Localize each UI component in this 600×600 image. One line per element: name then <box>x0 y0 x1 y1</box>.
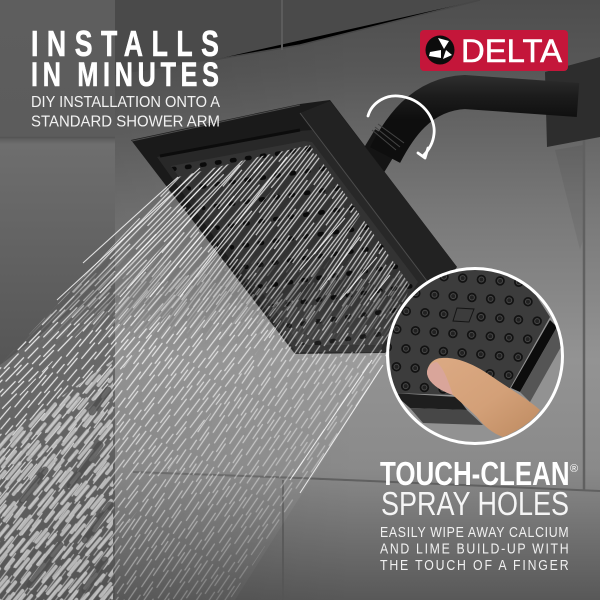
callout: finger on spray holes <box>386 267 564 445</box>
water spray streaks <box>0 145 410 600</box>
text: installation description: DIY INSTALLATION ONTO A <box>31 94 220 111</box>
logo mark <box>426 36 454 64</box>
shower arm and wall plate <box>368 57 600 170</box>
heading: touch-clean spray holes: ® <box>570 463 578 475</box>
Delta logo <box>420 30 568 71</box>
text: touch-clean description: THE TOUCH OF A FINGER <box>380 557 569 573</box>
text: touch-clean description: EASILY WIPE AWAY CALCIUM <box>380 524 569 540</box>
icon: square sensor mark <box>453 308 474 322</box>
heading: touch-clean spray holes <box>380 456 578 522</box>
heading: installs in minutes <box>31 23 219 94</box>
text: installation description: STANDARD SHOWER ARM <box>31 114 220 130</box>
rotation arrow <box>368 96 434 158</box>
text: touch-clean description: AND LIME BUILD-UP WITH <box>380 540 569 557</box>
heading: installs in minutes: INSTALLS <box>31 23 219 64</box>
Delta logo: DELTA <box>461 33 563 69</box>
spray holes on head <box>172 146 412 345</box>
icon: finger <box>427 358 540 437</box>
text: installation description <box>31 94 220 130</box>
spray holes close-up <box>389 273 544 394</box>
shower head <box>131 100 457 354</box>
heading: touch-clean spray holes: TOUCH-CLEAN <box>380 456 570 493</box>
heading: installs in minutes: IN MINUTES <box>31 56 219 94</box>
text: touch-clean description <box>380 524 569 573</box>
